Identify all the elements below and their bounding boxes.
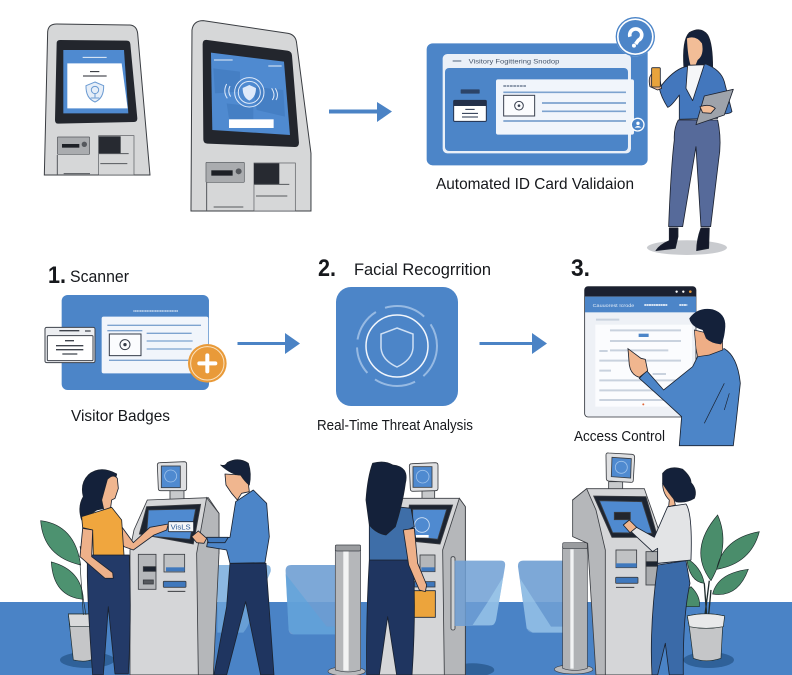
caption: visitor badges: Visitor Badges	[71, 408, 170, 425]
plant right	[683, 515, 759, 668]
plant left	[41, 521, 130, 668]
arrow: step 1 to step 2	[238, 333, 300, 354]
step 1 number: 1.	[48, 262, 66, 289]
man in blue	[168, 460, 274, 675]
gate bollard	[554, 543, 593, 674]
woman with phone and tablet	[647, 30, 733, 255]
panel: shield threat analysis	[336, 287, 458, 406]
arrow: step 2 to step 3	[480, 333, 547, 354]
caption: real-time threat analysis: Real-Time Threat Analysis	[317, 418, 473, 434]
man in blue: VisLS	[171, 524, 191, 531]
icon: question mark	[616, 17, 655, 56]
badge icon	[454, 89, 486, 121]
center kiosk	[369, 463, 494, 675]
center woman from behind	[366, 462, 435, 675]
step 3 number: 3.	[571, 255, 590, 282]
step 2 title: Facial Recogrrition	[354, 261, 491, 279]
kiosk 2: face scan screen	[191, 21, 311, 211]
bottom scene: center kiosk, gates, right kiosk, people and plant	[366, 453, 759, 675]
user badge icon	[631, 118, 645, 132]
step 1 title: Scanner	[70, 268, 129, 286]
floor band	[0, 602, 792, 675]
center gate panels	[455, 561, 505, 626]
gate panels	[217, 565, 271, 633]
kiosk left	[130, 462, 219, 675]
caption: access control: Access Control	[574, 428, 665, 445]
ID card form	[496, 79, 634, 135]
step 2 number: 2.	[318, 255, 336, 282]
caption: automated ID card validation: Automated ID Card Validaion	[436, 176, 634, 193]
arrow: kiosk to validation	[329, 102, 392, 122]
panel: automated ID card validation	[427, 17, 733, 255]
panel: visitor badges	[45, 295, 227, 390]
panel heading text: Visitory Fogittering Snodop	[469, 58, 560, 65]
panel: access control window with man	[585, 287, 740, 446]
bottom scene: left plant, kiosk and two people	[41, 460, 365, 675]
icon: orange plus	[188, 344, 227, 383]
bollard	[328, 545, 365, 675]
right woman	[623, 468, 695, 675]
panel: access control window with man: Cauuorest Icrode	[593, 303, 635, 309]
right kiosk	[573, 453, 660, 675]
kiosk 1: badge screen	[44, 24, 150, 175]
woman in yellow	[80, 470, 168, 675]
